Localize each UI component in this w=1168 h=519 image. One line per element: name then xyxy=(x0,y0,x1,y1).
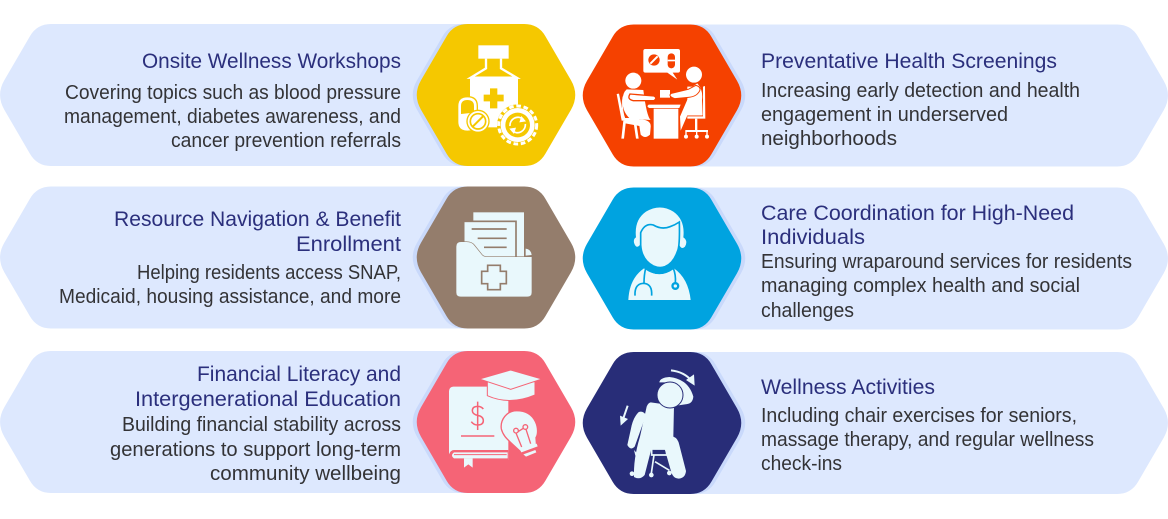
body text xyxy=(761,251,1132,322)
panel: Wellness Activities xyxy=(583,352,1168,494)
icon: medicine bottle, pills and gear xyxy=(457,45,538,146)
heading xyxy=(135,363,401,411)
body text xyxy=(64,82,401,152)
icon: doctor with stethoscope xyxy=(628,207,691,300)
heading: Resource Navigation & Benefit xyxy=(114,208,401,231)
heading: Individuals xyxy=(761,226,865,249)
body text: Medicaid, housing assistance, and more xyxy=(59,286,401,308)
panel: Preventative Health Screenings xyxy=(583,24,1168,166)
body text: cancer prevention referrals xyxy=(171,130,401,152)
body text xyxy=(110,414,401,485)
panel: Care Coordination for High-Need Individuals xyxy=(583,188,1168,330)
panel: Financial Literacy and Intergenerational Education xyxy=(0,351,575,493)
icon: doctor consultation at desk xyxy=(617,49,709,139)
body text: generations to support long-term xyxy=(110,439,401,461)
panel: Onsite Wellness Workshops xyxy=(0,24,575,166)
heading: Care Coordination for High-Need xyxy=(761,202,1074,225)
body text: Increasing early detection and health xyxy=(761,80,1080,102)
body text: engagement in underserved xyxy=(761,104,1008,126)
heading: Intergenerational Education xyxy=(135,388,401,411)
body text: managing complex health and social xyxy=(761,275,1080,297)
body text: Helping residents access SNAP, xyxy=(137,262,401,284)
panel: Resource Navigation & Benefit Enrollment xyxy=(0,186,575,328)
body text: challenges xyxy=(761,300,854,322)
icon: book, graduation cap and light bulb xyxy=(449,370,542,468)
heading: Preventative Health Screenings xyxy=(761,50,1057,73)
body text: Covering topics such as blood pressure xyxy=(65,82,401,104)
body text xyxy=(59,262,401,308)
icon: medical records folder xyxy=(456,212,532,297)
body text: check-ins xyxy=(761,453,842,475)
heading xyxy=(761,202,1074,249)
body text: community wellbeing xyxy=(210,463,401,485)
heading xyxy=(114,208,401,256)
body text: Including chair exercises for seniors, xyxy=(761,405,1077,427)
icon: person stretching in chair xyxy=(620,370,695,479)
body text: massage therapy, and regular wellness xyxy=(761,429,1094,451)
body text: neighborhoods xyxy=(761,128,897,150)
body text: Ensuring wraparound services for residents xyxy=(761,251,1132,273)
heading: Enrollment xyxy=(296,233,401,256)
heading: Wellness Activities xyxy=(761,376,935,399)
heading: Onsite Wellness Workshops xyxy=(142,50,401,73)
body text: Building financial stability across xyxy=(122,414,401,436)
body text xyxy=(761,405,1094,475)
body text: management, diabetes awareness, and xyxy=(64,106,401,128)
heading: Financial Literacy and xyxy=(197,363,401,386)
body text xyxy=(761,80,1080,150)
